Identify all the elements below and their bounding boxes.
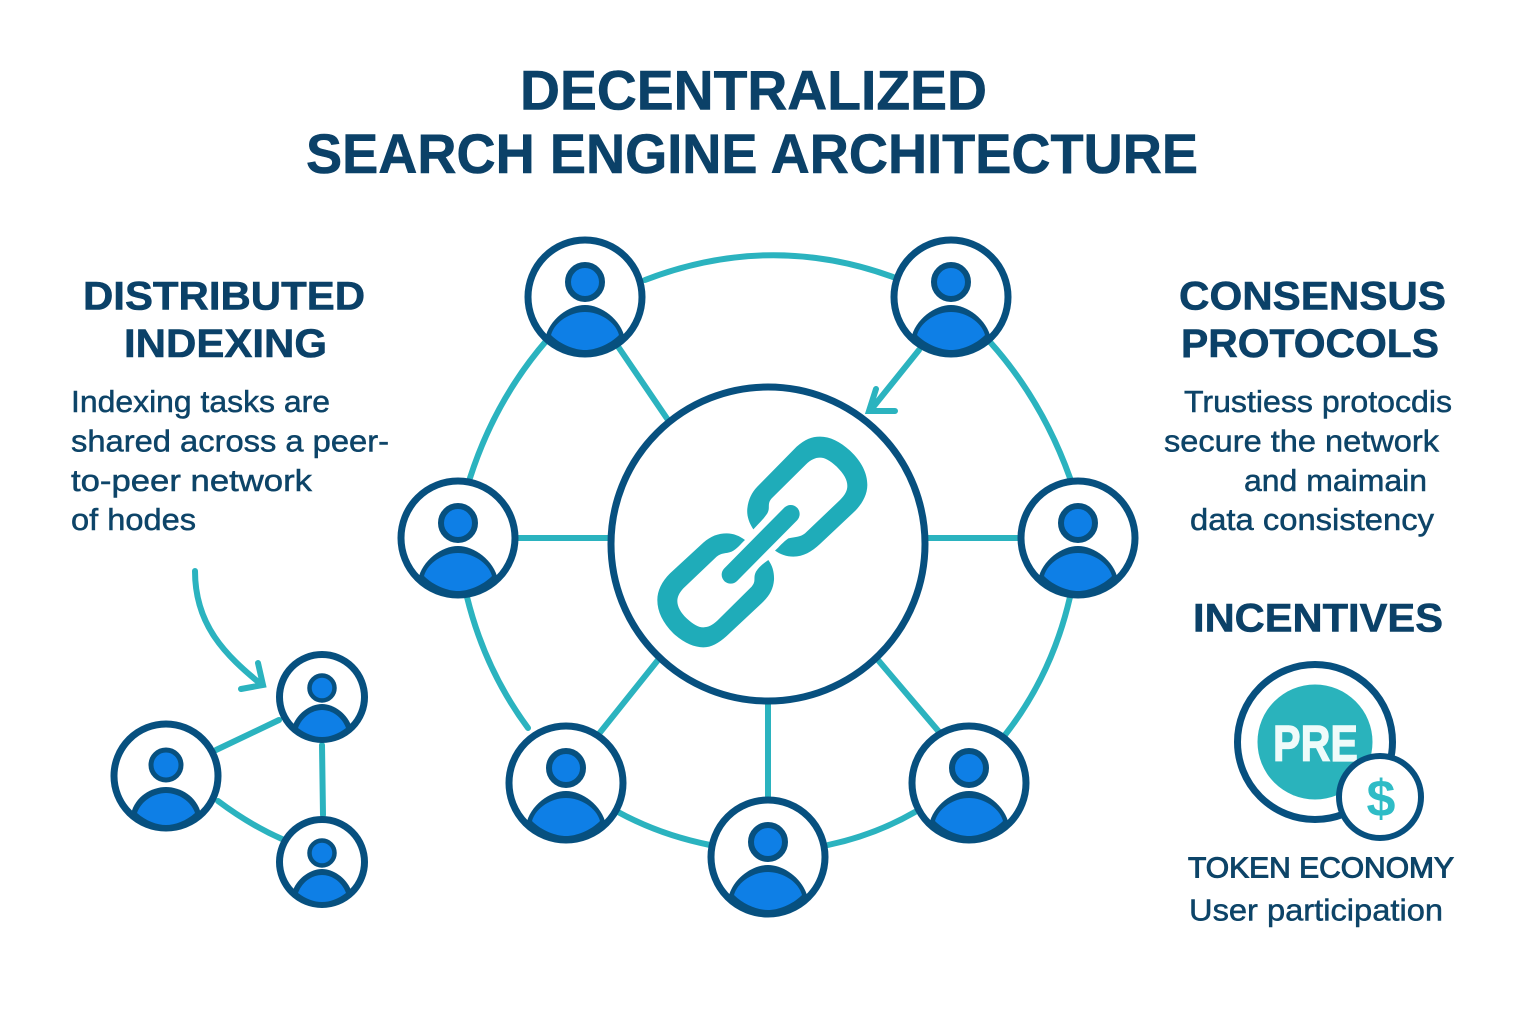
text: consensus protocols description (1164, 384, 1452, 537)
text: distributed indexing description: Indexing tasks are (71, 384, 330, 419)
text: distributed indexing description: to-peer network (71, 463, 313, 498)
text: consensus protocols description: Trustiess protocdis (1184, 384, 1452, 419)
title: DECENTRALIZED (520, 58, 987, 122)
icon: token coin: $ (1367, 770, 1396, 828)
text: consensus protocols description: secure the network (1164, 424, 1440, 458)
title: SEARCH ENGINE ARCHITECTURE (306, 122, 1198, 185)
icon: token coin (1238, 664, 1421, 838)
network nodes (401, 240, 1135, 915)
icon: token coin: PRE (1273, 715, 1358, 772)
small peer network (114, 654, 364, 905)
spokes from hub to nodes (518, 345, 1018, 798)
text: distributed indexing description: shared across a peer- (71, 424, 389, 458)
heading: distributed indexing: DISTRIBUTED (83, 274, 365, 318)
network ring connectors (467, 255, 1070, 845)
text: distributed indexing description (71, 384, 389, 537)
text: distributed indexing description: of hodes (71, 502, 196, 537)
central hub circle (611, 387, 925, 701)
title (306, 58, 1198, 185)
heading: incentives: INCENTIVES (1193, 596, 1443, 640)
text: consensus protocols description: and maimain (1244, 463, 1427, 498)
arrow: indexing to peer network (195, 571, 263, 689)
heading: consensus protocols (1179, 274, 1446, 366)
text: user participation: User participation (1189, 892, 1443, 928)
heading: consensus protocols: CONSENSUS (1179, 274, 1446, 318)
icon: chain link (657, 437, 867, 647)
heading: distributed indexing: INDEXING (124, 322, 327, 366)
arrow: node to hub (869, 350, 919, 411)
text: consensus protocols description: data consistency (1190, 502, 1435, 537)
heading: distributed indexing (83, 274, 365, 366)
text: token economy: TOKEN ECONOMY (1188, 852, 1454, 884)
heading: consensus protocols: PROTOCOLS (1181, 322, 1439, 366)
